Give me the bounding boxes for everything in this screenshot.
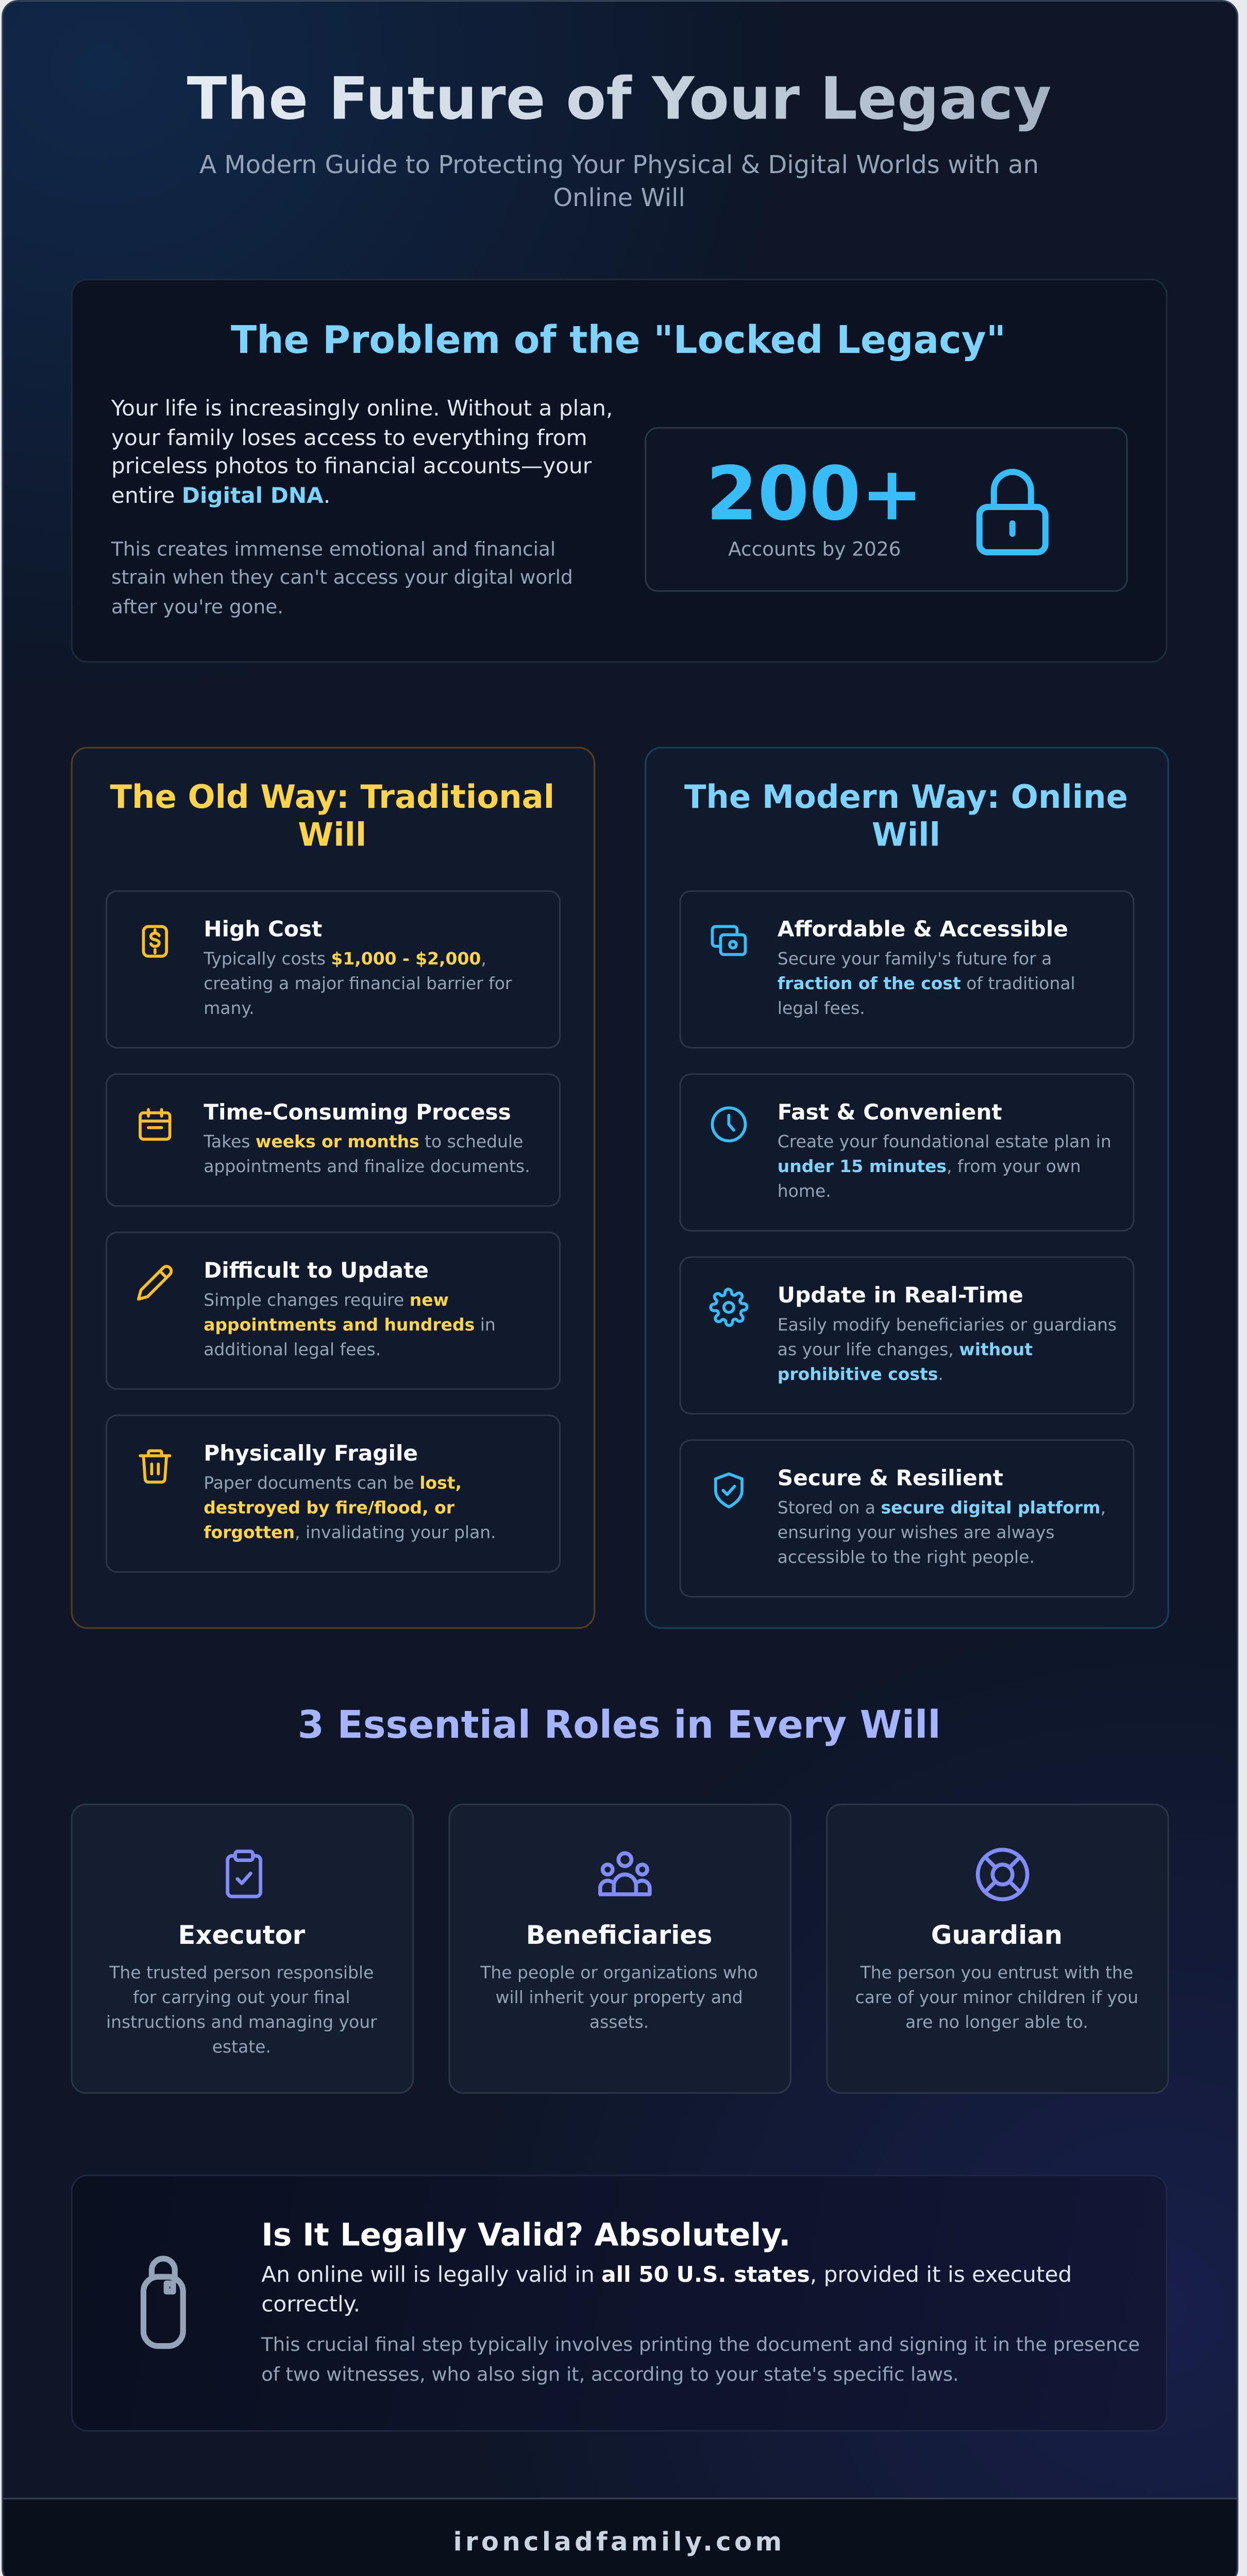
- icon: lock: [976, 469, 1049, 555]
- stat box: [644, 427, 1127, 592]
- item: difficult to update: [105, 1231, 560, 1390]
- stat label: Accounts by 2026: [728, 537, 901, 561]
- title: The Future of Your Legacy: [187, 66, 1051, 133]
- item: affordable: Secure your family's future for a fraction of the cost of traditional legal fees.: [778, 950, 1075, 1019]
- heading: roles: 3 Essential Roles in Every Will: [298, 1705, 941, 1748]
- icon: people: [598, 1851, 652, 1896]
- heading: old way: Will: [298, 815, 366, 853]
- item: secure: [679, 1439, 1134, 1598]
- item: difficult to update: Simple changes require new appointments and hundreds in additional legal fees.: [204, 1291, 496, 1360]
- icon: lock: [140, 2256, 186, 2349]
- footer: [3, 2498, 1236, 2576]
- panel: legally valid: [70, 2175, 1167, 2432]
- heading: modern way: The Modern Way: Online: [684, 778, 1128, 816]
- title: [3, 63, 1236, 139]
- text: strain: This creates immense emotional and financial strain when they can't access your digital world after you're gone.: [111, 537, 573, 618]
- item: fragile: Physically Fragile: [204, 1443, 418, 1467]
- role: guardian: [825, 1804, 1168, 2094]
- role: beneficiaries: The people or organizations who will inherit your property and assets.: [480, 1963, 758, 2033]
- heading: old way: [110, 778, 554, 853]
- item: difficult to update: Difficult to Update: [204, 1260, 429, 1284]
- panel: old way: [70, 747, 595, 1629]
- item: high cost: Typically costs $1,000 - $2,000, creating a major financial barrier for many.: [204, 950, 512, 1019]
- item: update: Update in Real-Time: [778, 1284, 1023, 1309]
- role: executor: The trusted person responsible for carrying out your final instructions and managing your estate.: [106, 1963, 377, 2058]
- item: time consuming: [105, 1073, 560, 1207]
- stat number: 200+: [706, 450, 923, 537]
- text: witnesses: This crucial final step typically involves printing the document and signing it in the presence of two witnesses, who also sign it, according to your state's specific laws.: [261, 2333, 1140, 2385]
- role: beneficiaries: [448, 1804, 790, 2094]
- item: high cost: High Cost: [204, 918, 322, 943]
- icon: clipboard: [226, 1850, 262, 1898]
- item: fast: Create your foundational estate plan in under 15 minutes, from your own home.: [778, 1132, 1111, 1202]
- item: time consuming: Time-Consuming Process: [204, 1101, 511, 1126]
- item: time consuming: Takes weeks or months to schedule appointments and finalize documents.: [204, 1132, 530, 1177]
- role: beneficiaries: Beneficiaries: [526, 1921, 712, 1951]
- heading: modern way: [684, 778, 1128, 853]
- item: affordable: [679, 890, 1134, 1048]
- item: update: Easily modify beneficiaries or guardians as your life changes, without prohibitive costs.: [778, 1316, 1117, 1385]
- panel: modern way: [644, 747, 1168, 1629]
- text: valid in 50 states: An online will is legally valid in all 50 U.S. states, provided it is executed correctly.: [261, 2264, 1072, 2317]
- item: update: [679, 1256, 1134, 1415]
- footer url: ironcladfamily.com: [453, 2528, 785, 2557]
- item: secure: Stored on a secure digital platform, ensuring your wishes are always accessible to the right people.: [778, 1499, 1106, 1568]
- item: fast: [679, 1073, 1134, 1231]
- text: problem intro: Your life is increasingly online. Without a plan, your family loses access to everything from priceless photos to financial accounts—your entire Digital DNA.: [111, 397, 613, 509]
- item: high cost: [105, 890, 560, 1048]
- heading: problem: The Problem of the "Locked Legacy": [231, 320, 1006, 363]
- heading: legally valid: Is It Legally Valid? Absolutely.: [261, 2217, 790, 2253]
- heading: old way: The Old Way: Traditional: [110, 778, 554, 816]
- role: guardian: Guardian: [931, 1921, 1063, 1951]
- item: fast: Fast & Convenient: [778, 1101, 1002, 1126]
- role: guardian: The person you entrust with the care of your minor children if you are no longer able to.: [855, 1963, 1138, 2033]
- role: executor: [70, 1804, 413, 2094]
- item: fragile: [105, 1415, 560, 1573]
- role: executor: Executor: [178, 1921, 305, 1951]
- item: secure: Secure & Resilient: [778, 1467, 1003, 1492]
- item: affordable: Affordable & Accessible: [778, 918, 1068, 943]
- icon: lifebuoy: [976, 1848, 1030, 1901]
- panel: locked legacy problem: [70, 279, 1167, 663]
- item: fragile: Paper documents can be lost, destroyed by fire/flood, or forgotten, invalidating your plan.: [204, 1474, 496, 1543]
- subtitle: A Modern Guide to Protecting Your Physical & Digital Worlds with an Online Will: [199, 150, 1039, 213]
- heading: modern way: Will: [872, 815, 940, 853]
